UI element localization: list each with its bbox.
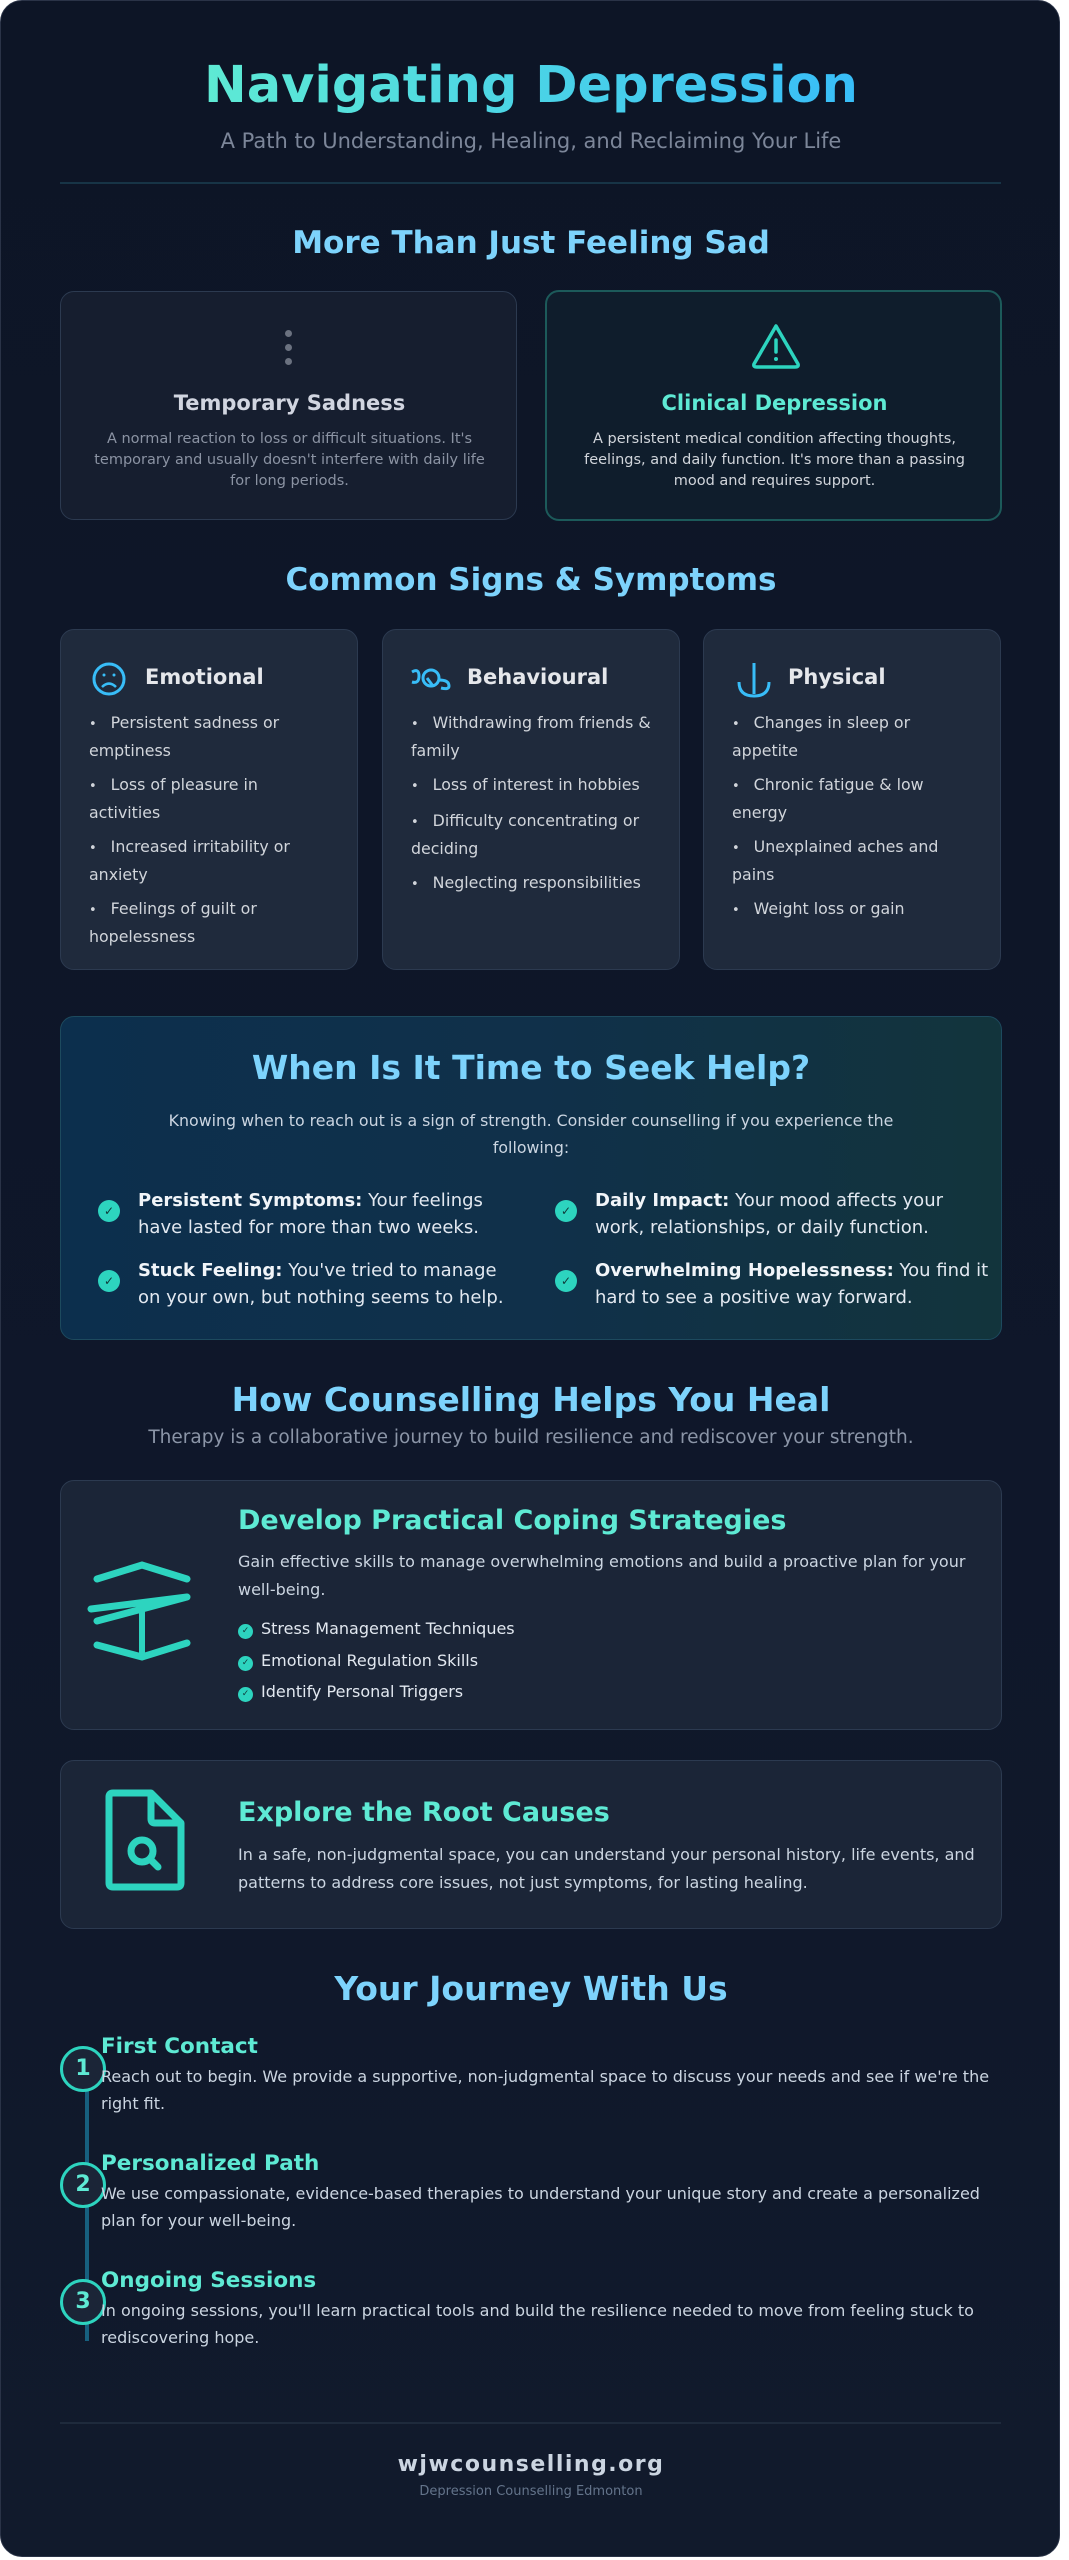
- text: A normal reaction to loss or difficult situations. It's temporary and usually doesn't interfere with daily life for long periods.: [94, 431, 485, 489]
- card: physical: Physical: [788, 665, 886, 689]
- step 3: In ongoing sessions, you'll learn practical tools and build the resilience needed to move from feeling stuck to rediscovering hope.: [101, 2301, 974, 2347]
- heading: journey: Your Journey With Us: [334, 1969, 728, 2008]
- heading: Temporary Sadness: [174, 391, 405, 415]
- panel: seek help: [60, 1016, 1002, 1340]
- heading: Explore the Root Causes: [238, 1797, 610, 1828]
- text: In a safe, non-judgmental space, you can understand your personal history, life events, and patterns to address core issues, not just symptoms, for lasting healing.: [238, 1845, 975, 1892]
- step 3: Ongoing Sessions: [101, 2268, 316, 2293]
- heading: more than sad: More Than Just Feeling Sad: [292, 225, 770, 261]
- card: coping: [60, 1480, 1002, 1730]
- icon: file search: [106, 1790, 184, 1890]
- step 2: 2: [75, 2172, 91, 2197]
- item 3: ✓: [104, 1274, 114, 1288]
- item 1: Persistent Symptoms: Your feelings have lasted for more than two weeks.: [138, 1190, 483, 1238]
- subheading: Therapy is a collaborative journey to build resilience and rediscover your strength.: [148, 1427, 914, 1448]
- icon: dots: [285, 330, 292, 365]
- step 2: We use compassionate, evidence-based therapies to understand your unique story and create a personalized plan for your well-being.: [101, 2184, 980, 2230]
- step 3: [60, 2268, 974, 2347]
- heading: When Is It Time to Seek Help?: [252, 1048, 810, 1087]
- icon: warning: [752, 324, 800, 369]
- checklist: Identify Personal Triggers: [261, 1682, 463, 1701]
- card: behavioural: Loss of interest in hobbies: [433, 775, 640, 794]
- checklist: ✓: [242, 1658, 249, 1668]
- step 1: First Contact: [101, 2034, 258, 2059]
- card: behavioural: Behavioural: [467, 665, 608, 689]
- card: behavioural: Neglecting responsibilities: [433, 873, 641, 892]
- step 3: 3: [75, 2289, 91, 2314]
- card: emotional: Increased irritability or anxiety: [89, 837, 290, 884]
- checklist: ✓: [242, 1689, 249, 1699]
- card: emotional: Loss of pleasure in activities: [89, 775, 258, 822]
- intro text: Knowing when to reach out is a sign of strength. Consider counselling if you experience the following:: [169, 1111, 893, 1157]
- step 1: Reach out to begin. We provide a supportive, non-judgmental space to discuss your needs and see if we're the right fit.: [101, 2067, 989, 2113]
- checklist: Emotional Regulation Skills: [261, 1650, 478, 1670]
- icon: behaviour: [411, 668, 450, 690]
- card: physical: [703, 629, 1001, 970]
- card: root causes: [60, 1760, 1002, 1929]
- icon: sad face: [92, 662, 126, 696]
- title: Navigating Depression: [204, 56, 858, 115]
- checklist: Stress Management Techniques: [261, 1619, 515, 1638]
- step 2: [60, 2151, 980, 2230]
- heading: counselling: How Counselling Helps You Heal: [232, 1380, 830, 1419]
- footer site: wjwcounselling.org: [398, 2452, 664, 2477]
- checklist: [238, 1619, 515, 1702]
- heading: Clinical Depression: [662, 391, 887, 415]
- card: temporary sadness: [60, 291, 517, 520]
- step 1: [60, 2034, 989, 2113]
- item 3: Stuck Feeling: You've tried to manage on your own, but nothing seems to help.: [138, 1260, 504, 1308]
- item 4: ✓: [561, 1274, 571, 1288]
- card: behavioural: Difficulty concentrating or deciding: [411, 811, 639, 858]
- heading: signs: Common Signs & Symptoms: [286, 562, 776, 598]
- heading: Develop Practical Coping Strategies: [238, 1505, 787, 1536]
- card: physical: Changes in sleep or appetite: [732, 713, 910, 760]
- card: emotional: Persistent sadness or emptiness: [89, 713, 279, 760]
- text: A persistent medical condition affecting thoughts, feelings, and daily function. It's more than a passing mood and requires support.: [584, 431, 965, 489]
- timeline line: [85, 2071, 89, 2341]
- card: physical: Weight loss or gain: [754, 899, 905, 918]
- item 2: ✓: [561, 1204, 571, 1218]
- icon: anchor: [738, 663, 770, 698]
- subtitle: A Path to Understanding, Healing, and Reclaiming Your Life: [221, 129, 841, 153]
- item 1: ✓: [104, 1204, 114, 1218]
- card: physical: Chronic fatigue & low energy: [732, 775, 924, 822]
- card: emotional: Feelings of guilt or hopelessness: [89, 899, 257, 946]
- checklist: ✓: [242, 1626, 249, 1636]
- step 1: 1: [75, 2056, 91, 2081]
- card: emotional: Emotional: [145, 665, 264, 689]
- card: emotional: [60, 629, 358, 970]
- step 2: Personalized Path: [101, 2151, 319, 2176]
- footer sub: Depression Counselling Edmonton: [419, 2484, 643, 2499]
- card: physical: Unexplained aches and pains: [732, 837, 938, 884]
- text: Gain effective skills to manage overwhelming emotions and build a proactive plan for your well-being.: [238, 1552, 965, 1599]
- item 4: Overwhelming Hopelessness: You find it hard to see a positive way forward.: [595, 1260, 988, 1308]
- icon: signpost: [88, 1561, 190, 1661]
- card: behavioural: Withdrawing from friends & family: [411, 713, 651, 760]
- item 2: Daily Impact: Your mood affects your work, relationships, or daily function.: [595, 1190, 943, 1238]
- card: clinical depression: [545, 290, 1002, 521]
- card: behavioural: [382, 629, 680, 970]
